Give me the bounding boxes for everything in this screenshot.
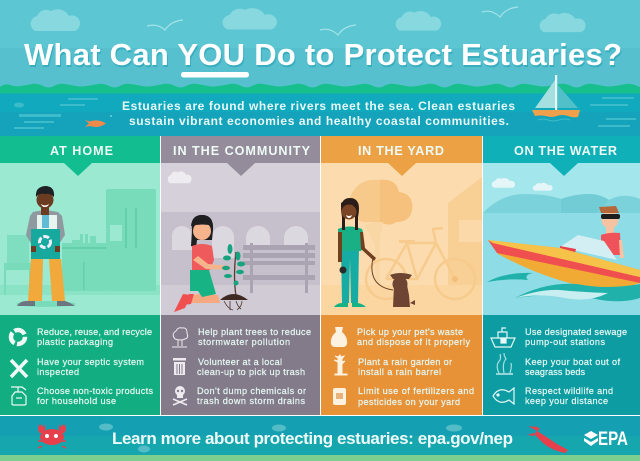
list text: at home: Have your septic system xyxy=(37,357,144,367)
icon: skull and crossbones xyxy=(173,386,187,405)
title: What Can YOU Do to Protect Estuaries? xyxy=(24,37,622,72)
list text: on the water: Respect wildlife and xyxy=(525,386,613,396)
park background xyxy=(161,171,320,316)
yard background xyxy=(321,177,482,316)
list text: on the water: Keep your boat out of xyxy=(525,357,620,367)
panel: at home xyxy=(0,136,160,316)
icon: fish xyxy=(493,388,514,404)
heading: on the water: ON THE WATER xyxy=(514,144,617,158)
dog xyxy=(390,273,415,307)
icon: tools xyxy=(11,360,27,377)
list: in the community xyxy=(161,315,320,415)
intro text: Estuaries are found where rivers meet the sea. Clean estuaries xyxy=(122,99,515,113)
icon: boat xyxy=(491,328,515,347)
list text: in the yard: Limit use of fertilizers and xyxy=(358,386,474,396)
EPA logo xyxy=(584,429,628,450)
man with recycling bin xyxy=(16,186,76,307)
header banner xyxy=(0,0,640,136)
list text: on the water xyxy=(525,327,627,406)
list text: in the community: Don't dump chemicals or xyxy=(197,386,306,396)
list: in the yard xyxy=(321,315,482,415)
list text: on the water: pump-out stations xyxy=(525,337,605,347)
title: What Can YOU Do to Protect Estuaries? xyxy=(25,39,623,74)
list text: in the yard: install a rain barrel xyxy=(358,367,441,377)
green shoreline wave xyxy=(0,84,640,95)
footer xyxy=(0,416,640,461)
list: on the water xyxy=(483,315,640,415)
list text: at home: plastic packaging xyxy=(37,337,113,347)
heading: on the water xyxy=(483,136,640,176)
EPA logo: EPA xyxy=(598,429,628,450)
birds xyxy=(147,7,518,35)
list text: at home: inspected xyxy=(37,367,79,377)
list text: in the community: stormwater pollution xyxy=(198,337,290,347)
young tree xyxy=(220,244,248,310)
kitchen background xyxy=(0,189,160,295)
list text: in the community: clean-up to pick up trash xyxy=(197,367,305,377)
icon: rain garden plant xyxy=(334,355,347,375)
heading: in the yard xyxy=(321,136,482,176)
list text: in the yard: Pick up your pet's waste xyxy=(357,327,463,337)
fish silhouettes xyxy=(99,424,462,452)
list text: in the yard: Plant a rain garden or xyxy=(358,357,452,367)
intro text xyxy=(122,99,515,128)
water band xyxy=(0,94,640,136)
icon: fertilizer bag xyxy=(333,388,346,405)
panel: in the yard xyxy=(321,136,482,316)
clouds xyxy=(31,8,586,32)
woman walking dog xyxy=(334,198,393,307)
icon: seagrass xyxy=(496,353,513,374)
icon: fish xyxy=(85,115,112,127)
heading: at home xyxy=(0,136,160,176)
list text: on the water: keep your distance xyxy=(525,396,608,406)
icon: lobster xyxy=(527,425,568,453)
icon: spray bottle xyxy=(11,387,26,405)
icon: sailboat xyxy=(532,75,580,121)
speedboat xyxy=(488,235,640,292)
list text: on the water: Use designated sewage xyxy=(525,327,627,337)
seagrass strip xyxy=(0,455,640,461)
heading: in the community xyxy=(161,136,320,176)
list text: in the yard: and dispose of it properly xyxy=(357,337,470,347)
list text: at home xyxy=(37,327,153,406)
icon: recycle xyxy=(11,330,25,344)
list text: at home: for household use xyxy=(37,396,116,406)
list text: in the yard: pesticides on your yard xyxy=(358,397,460,407)
waves xyxy=(487,273,640,301)
list text: at home: Reduce, reuse, and recycle xyxy=(37,327,152,337)
icon: crab xyxy=(38,424,66,448)
icon: tree xyxy=(172,328,188,347)
heading: in the community: IN THE COMMUNITY xyxy=(173,144,311,158)
list text: on the water: seagrass beds xyxy=(525,367,585,377)
list text: in the community: trash down storm drains xyxy=(197,396,305,406)
list text: in the community: Volunteer at a local xyxy=(198,357,282,367)
speedboat driver xyxy=(599,206,624,258)
list text: at home: Choose non-toxic products xyxy=(37,386,153,396)
footer link text: Learn more about protecting estuaries: epa.gov/nep xyxy=(112,429,513,448)
panel: in the community xyxy=(161,136,320,316)
heading: in the yard: IN THE YARD xyxy=(358,144,444,158)
list: at home xyxy=(0,315,160,415)
icon: waste bag xyxy=(331,327,347,347)
panel: on the water xyxy=(483,136,640,316)
heading: at home: AT HOME xyxy=(50,144,113,158)
girl planting a tree xyxy=(174,215,230,312)
list text: in the community: Help plant trees to reduce xyxy=(198,327,311,337)
intro text: sustain vibrant economies and healthy coastal communities. xyxy=(129,114,509,128)
list text: in the yard xyxy=(357,327,474,407)
list text: in the community xyxy=(197,327,311,406)
lake background xyxy=(483,178,640,316)
icon: trash can xyxy=(173,358,186,375)
